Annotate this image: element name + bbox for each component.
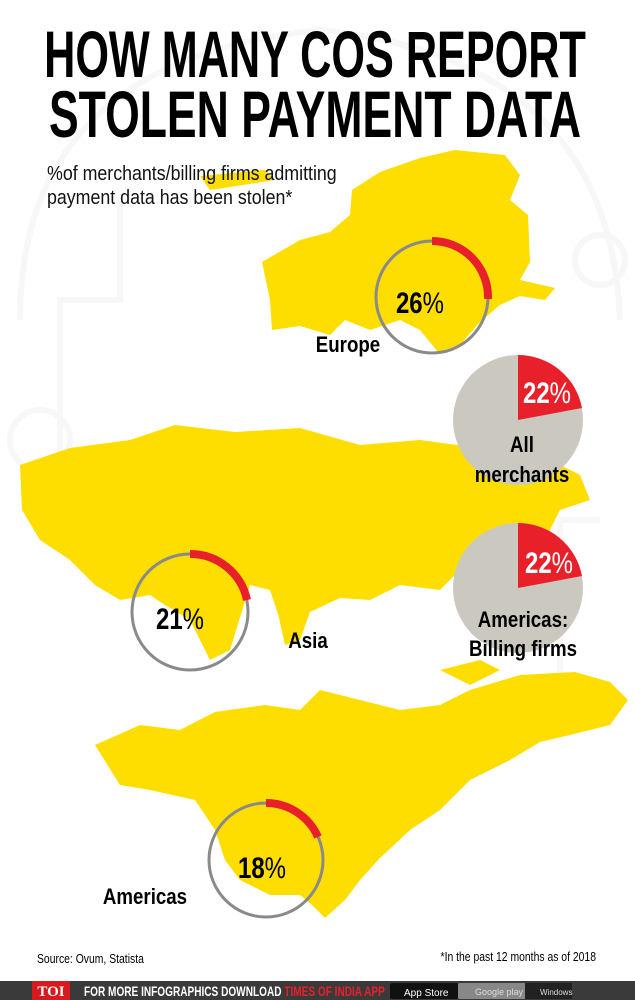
pie: All merchants 22% xyxy=(453,355,583,487)
pie: All merchants 22%: merchants xyxy=(475,464,569,487)
pie: Americas billing firms 22%: Americas: xyxy=(478,609,568,632)
footer bar: TOI xyxy=(37,984,65,1000)
map: Europe xyxy=(200,150,555,352)
title: STOLEN PAYMENT DATA xyxy=(49,77,581,151)
footer bar: App Store xyxy=(404,988,449,999)
title xyxy=(44,18,586,151)
pie: Americas billing firms 22%: 22% xyxy=(525,545,573,580)
subtitle: %of merchants/billing firms admitting xyxy=(47,163,337,185)
ring: Europe 26%: 26% xyxy=(396,285,444,320)
footer bar: FOR MORE INFOGRAPHICS DOWNLOAD TIMES OF INDIA APP xyxy=(84,983,385,999)
ring: Asia 21%: Asia xyxy=(288,630,328,653)
subtitle: payment data has been stolen* xyxy=(47,187,293,209)
pie: Americas billing firms 22%: Billing firms xyxy=(469,638,577,661)
ring: Asia 21%: 21% xyxy=(156,601,204,636)
ring: Americas 18% xyxy=(103,803,323,917)
pie: All merchants 22%: 22% xyxy=(523,375,571,410)
ring: Americas 18%: 18% xyxy=(238,850,286,885)
source note: Source: Ovum, Statista xyxy=(37,952,144,966)
title: HOW MANY COS REPORT xyxy=(44,18,586,91)
map: Asia xyxy=(20,425,590,660)
subtitle xyxy=(47,163,337,209)
ring: Europe 26% xyxy=(316,241,488,357)
background circuit pattern xyxy=(10,30,625,700)
footer bar: Google play xyxy=(475,987,524,997)
footer bar: Windows xyxy=(540,988,572,997)
ring: Americas 18%: Americas xyxy=(103,886,187,909)
ring: Europe 26%: Europe xyxy=(316,334,380,357)
footnote: *In the past 12 months as of 2018 xyxy=(441,950,596,964)
pie: Americas billing firms 22% xyxy=(453,523,583,661)
map: North America xyxy=(95,660,628,918)
pie: All merchants 22%: All xyxy=(510,434,534,457)
footer bar xyxy=(0,981,635,1000)
ring: Asia 21% xyxy=(132,554,328,670)
